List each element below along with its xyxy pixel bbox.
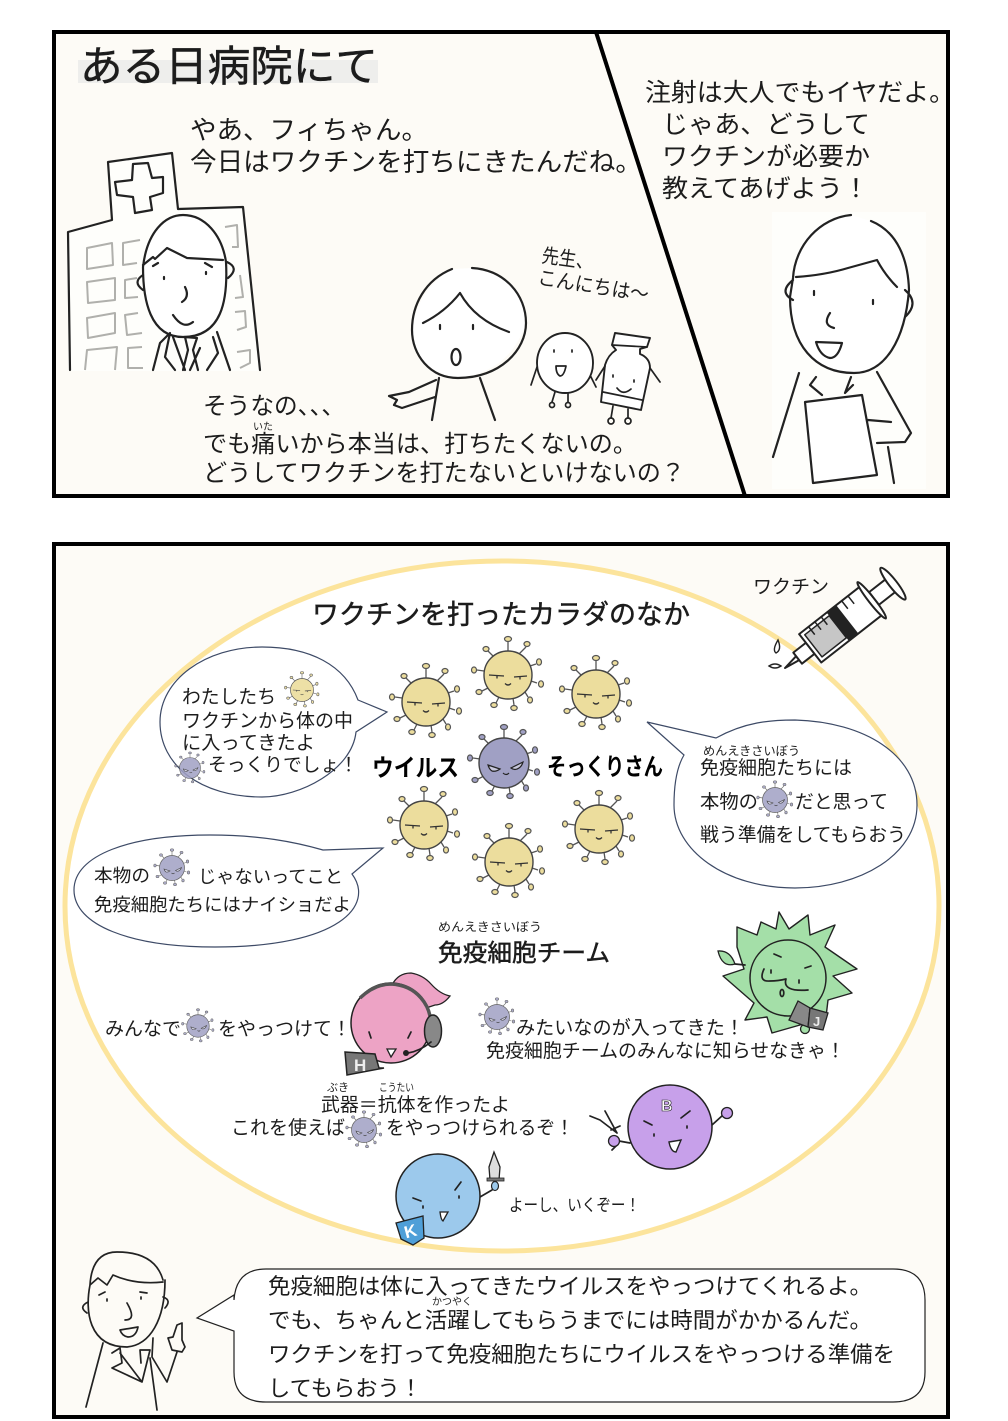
label: ウイルス: ウイルス: [372, 755, 459, 782]
illustration: doctor left: [138, 215, 234, 370]
illustration: hospital building: [68, 153, 262, 371]
icon: yellow virus: [388, 786, 460, 860]
text: みんなで をやっつけて: [105, 1009, 351, 1042]
heading: 免疫細胞チーム: [438, 920, 610, 967]
child and vaccine speech: 先生、: [540, 244, 595, 274]
icon: purple virus small: [346, 1111, 382, 1148]
character: green cell J: [718, 912, 857, 1034]
heading: 免疫細胞チーム: 免疫細胞チーム: [438, 940, 610, 967]
label: そっくりさん: そっくりさん: [547, 754, 663, 781]
speech bubble: 本物のじゃないってこと: [74, 835, 383, 947]
character: pink helper cell H: H: [354, 1056, 366, 1075]
speech bubble: explanation: してもらおう！: [268, 1376, 422, 1401]
doctor explanation text: ワクチンが必要か: [662, 143, 870, 171]
child question text: そうなの、、、: [203, 393, 345, 420]
illustration: doctor pointing: [83, 1252, 185, 1410]
speech bubble: 免疫細胞たちには: [647, 720, 917, 888]
text: 武器＝抗体を作ったよ: こうたい: [379, 1081, 414, 1094]
text: みたいなのが入ってきた: [479, 998, 845, 1062]
icon: yellow virus: [562, 790, 634, 864]
character: blue killer cell K: [396, 1152, 504, 1245]
body outline ellipse: [65, 561, 939, 1251]
text: みんなで をやっつけて: をやっつけて！: [218, 1018, 351, 1040]
title: ある日病院にて: ある日病院にて: [80, 43, 378, 90]
text: 武器＝抗体を作ったよ: ぶき: [327, 1081, 349, 1094]
character: purple B cell: B: [661, 1098, 673, 1115]
text: 武器＝抗体を作ったよ: 武器＝抗体を作ったよ: [321, 1094, 510, 1116]
text: 武器＝抗体を作ったよ: これを使えば: [231, 1117, 345, 1139]
speech bubble: 本物のじゃないってこと: 本物の: [94, 866, 150, 886]
text: みたいなのが入ってきた: 免疫細胞チームのみんなに知らせなきゃ！: [486, 1040, 845, 1062]
panel divider line: [596, 32, 745, 496]
virus lookalike cluster: [388, 636, 634, 898]
illustration: vaccine bottle character: [596, 333, 660, 424]
character: blue killer cell K: K: [402, 1220, 420, 1242]
icon: yellow virus: [560, 656, 632, 730]
doctor greeting text: [190, 115, 642, 177]
child question text: どうしてワクチンを打たないといけないの？: [203, 460, 685, 487]
child and vaccine speech: こんにちは～: [536, 267, 650, 306]
text: 武器＝抗体を作ったよ: [231, 1081, 574, 1148]
icon: purple virus small: [757, 781, 793, 818]
label: ワクチン: ワクチン: [753, 576, 829, 598]
speech bubble: explanation: 免疫細胞は体に入ってきたウイルスをやっつけてくれるよ。: [268, 1274, 872, 1299]
panel frame: [54, 32, 948, 496]
icon: syringe: [771, 563, 910, 686]
icon: purple virus small: [175, 752, 205, 783]
character: pink helper cell H: [345, 973, 450, 1075]
heading: ワクチンを打ったカラダのなか: ワクチンを打ったカラダのなか: [312, 600, 690, 630]
doctor greeting text: やあ、フィちゃん。: [190, 115, 428, 145]
speech bubble: explanation: [197, 1269, 925, 1402]
heading: 免疫細胞チーム: めんえきさいぼう: [438, 920, 542, 934]
panel frame: [54, 544, 948, 1417]
icon: purple virus small: [182, 1009, 214, 1042]
doctor explanation text: じゃあ、どうして: [662, 111, 870, 139]
speech bubble: explanation: でも、ちゃんと活躍してもらうまでには時間がかかるんだ。: [268, 1308, 872, 1333]
speech bubble: 免疫細胞たちには: 本物の: [700, 791, 758, 813]
icon: purple virus small: [154, 849, 190, 886]
illustration: child: [389, 268, 526, 420]
child and vaccine speech: [536, 244, 650, 306]
speech bubble: 本物のじゃないってこと: じゃないってこと: [198, 867, 343, 887]
icon: droplets: [769, 640, 781, 668]
speech bubble: 免疫細胞たちには: 免疫細胞たちには: [700, 757, 852, 779]
speech bubble: わたしたち: に入ってきたよ: [182, 733, 315, 754]
doctor explanation text: [645, 79, 955, 203]
doctor greeting text: 今日はワクチンを打ちにきたんだね。: [190, 147, 642, 177]
text: よーし、いくぞー: よーし、いくぞー！: [509, 1196, 640, 1215]
speech bubble: 免疫細胞たちには: めんえきさいぼう: [703, 744, 800, 758]
child question text: いた: [253, 421, 273, 433]
panel: inside the body: [54, 544, 948, 1417]
icon: purple real virus: [468, 724, 540, 798]
icon: yellow virus: [390, 664, 462, 738]
speech bubble: explanation: かつやく: [432, 1296, 472, 1308]
speech bubble: わたしたち: ワクチンから体の中: [182, 710, 353, 732]
doctor explanation text: 注射は大人でもイヤだよ。: [645, 79, 955, 107]
character: green cell J: J: [813, 1014, 820, 1029]
child question text: [203, 393, 685, 487]
illustration: doctor right: [772, 212, 926, 489]
speech bubble: 免疫細胞たちには: だと思って: [795, 792, 888, 813]
panel: hospital comic: [54, 32, 955, 496]
doctor explanation text: 教えてあげよう！: [662, 175, 869, 203]
child question text: でも痛いから本当は、打ちたくないの。: [203, 431, 637, 458]
speech bubble: 免疫細胞たちには: 戦う準備をしてもらおう: [700, 824, 906, 846]
speech bubble: explanation: ワクチンを打って免疫細胞たちにウイルスをやっつける準備を: [268, 1342, 895, 1367]
speech bubble: わたしたち: そっくりでしょ！: [208, 755, 358, 776]
character: purple B cell: [590, 1085, 732, 1169]
text: みたいなのが入ってきた: みたいなのが入ってきた！: [516, 1017, 744, 1039]
speech bubble: わたしたち: [160, 647, 387, 797]
speech bubble: 本物のじゃないってこと: 免疫細胞たちにはナイショだよ: [94, 895, 351, 915]
icon: yellow virus: [472, 824, 544, 898]
icon: yellow virus: [472, 636, 544, 710]
icon: yellow virus small: [284, 672, 319, 707]
illustration: vaccine bubble character: [531, 333, 596, 408]
text: みんなで をやっつけて: みんなで: [105, 1019, 181, 1040]
icon: purple virus small: [479, 998, 515, 1035]
text: 武器＝抗体を作ったよ: をやっつけられるぞ！: [386, 1117, 574, 1139]
speech bubble: わたしたち: わたしたち: [182, 687, 276, 708]
